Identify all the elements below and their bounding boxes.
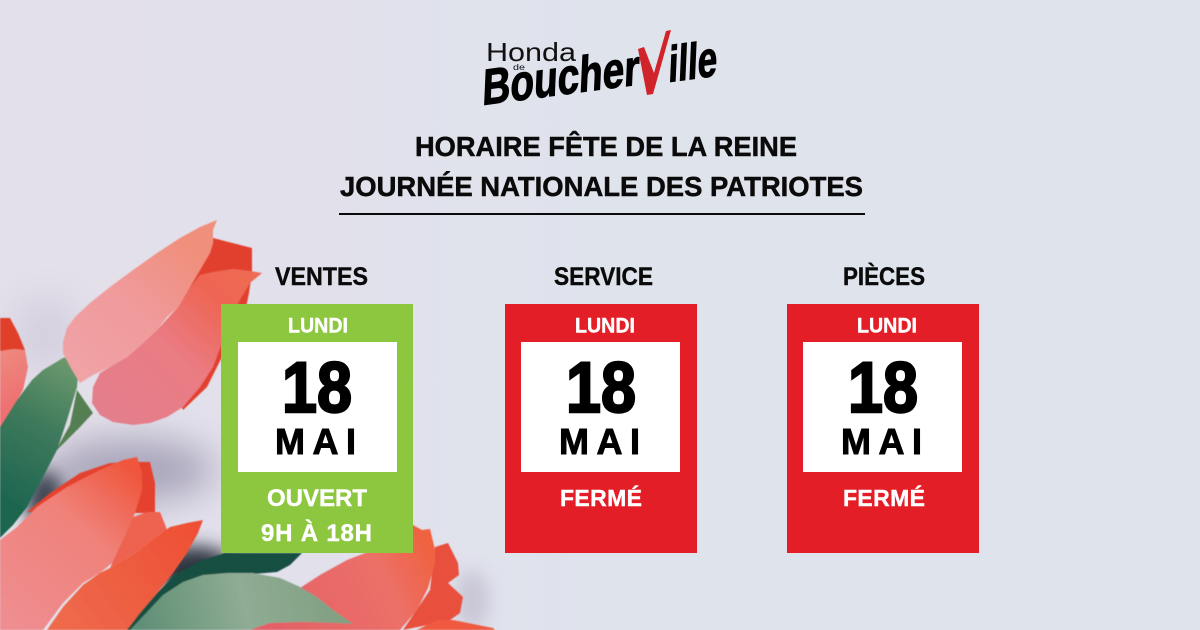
- month: MAI: [275, 421, 356, 462]
- stem: [55, 390, 93, 452]
- month: MAI: [841, 421, 922, 462]
- dark leaf behind: [125, 553, 302, 630]
- panel: ventes: [221, 263, 413, 553]
- front petal: [417, 620, 495, 630]
- panel: pieces: [787, 262, 979, 553]
- date number: 18: [282, 349, 352, 428]
- status: FERMÉ: [560, 484, 642, 511]
- main petal: [248, 525, 435, 630]
- right petal: [92, 269, 262, 425]
- heading: pieces: PIÈCES: [843, 262, 925, 291]
- left petal: [63, 220, 217, 383]
- bottom tulip: [248, 525, 495, 630]
- logo red V: [638, 30, 671, 95]
- date box: [521, 342, 680, 472]
- day: LUNDI: [288, 314, 348, 338]
- card: red: [505, 304, 697, 553]
- heading: service: SERVICE: [554, 263, 653, 291]
- title line 2: JOURNÉE NATIONALE DES PATRIOTES: [340, 171, 863, 202]
- status: OUVERT: [267, 485, 367, 512]
- back petals: [403, 543, 463, 630]
- title: [340, 131, 863, 202]
- middle petal: [110, 512, 168, 568]
- logo word: Boucher: Boucher: [482, 38, 641, 116]
- status: FERMÉ: [843, 484, 925, 511]
- hours: 9H À 18H: [261, 519, 372, 547]
- green leaf, left: [0, 353, 80, 538]
- date number: 18: [848, 349, 918, 428]
- date box: [803, 342, 962, 472]
- front petal: [47, 520, 203, 630]
- photo: tulips: [0, 220, 495, 630]
- day: LUNDI: [857, 314, 917, 338]
- date box: [238, 342, 397, 472]
- back petals: [27, 462, 155, 513]
- logo word: Honda: Honda: [486, 37, 577, 67]
- lower-left tulip: [0, 457, 203, 630]
- main petal: [0, 457, 142, 630]
- panel: service: [505, 263, 697, 553]
- title rule: [339, 213, 865, 215]
- date number: 18: [566, 349, 636, 428]
- petals and leaves: [0, 220, 495, 630]
- flower shadows: [10, 295, 488, 630]
- card: green: [221, 304, 413, 553]
- logo word: de: de: [513, 63, 526, 72]
- light green leaf: [130, 573, 353, 630]
- card: red: [787, 304, 979, 553]
- month: MAI: [559, 421, 640, 462]
- logo: Honda de Boucherville: [482, 29, 719, 116]
- upper tulip: [63, 220, 262, 425]
- logo word: ille: ille: [668, 29, 719, 93]
- day: LUNDI: [575, 314, 635, 338]
- heading: ventes: VENTES: [275, 263, 368, 291]
- back petals: [170, 238, 252, 410]
- tulip cut at left edge: [0, 318, 28, 430]
- title line 1: HORAIRE FÊTE DE LA REINE: [415, 131, 797, 162]
